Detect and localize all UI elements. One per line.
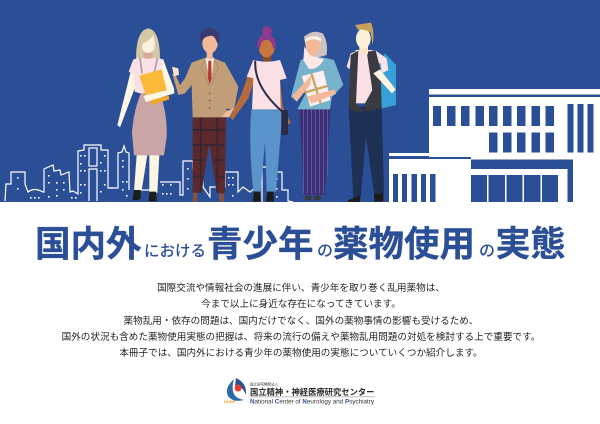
person: woman with crossbody bag bbox=[230, 26, 291, 202]
body text bbox=[62, 282, 540, 358]
lower roof band bbox=[471, 160, 573, 202]
skyline windows bbox=[17, 155, 278, 199]
logo bbox=[224, 378, 375, 406]
five young people bbox=[117, 23, 396, 202]
title: の bbox=[317, 243, 333, 260]
logo text: 国立研究開発法人 bbox=[250, 382, 278, 386]
logo text bbox=[250, 382, 375, 406]
lower windows bbox=[393, 174, 398, 202]
body line 1: 国際交流や情報社会の進展に伴い、青少年を取り巻く乱用薬物は、 bbox=[157, 282, 445, 294]
logo text: National Center of Neurology and Psychiatry bbox=[250, 398, 375, 406]
person: man in tan blazer bbox=[172, 28, 238, 202]
title: 青少年 bbox=[207, 224, 314, 264]
title: の bbox=[479, 243, 495, 260]
person: man with backpack bbox=[347, 23, 396, 202]
hospital building bbox=[389, 89, 600, 202]
title: 実態 bbox=[496, 225, 566, 264]
building main block bbox=[429, 89, 600, 94]
body line 2: 今まで以上に身近な存在になってきています。 bbox=[201, 299, 401, 310]
body line 3: 薬物乱用・依存の問題は、国内だけでなく、国外の薬物事情の影響も受けるため、 bbox=[124, 316, 478, 326]
logo mark bbox=[224, 378, 246, 404]
body line 5: 本冊子では、国内外における青少年の薬物使用の実態についていくつか紹介します。 bbox=[119, 348, 483, 358]
title: における bbox=[144, 242, 206, 260]
title bbox=[35, 224, 566, 264]
person: woman with book bbox=[117, 28, 174, 201]
building lower block bbox=[389, 153, 471, 156]
title: 薬物使用 bbox=[333, 224, 475, 264]
body line 4: 国外の状況も含めた薬物使用実態の把握は、将来の流行の備えや薬物乱用問題の対処を検討する上で重要です。 bbox=[62, 332, 540, 342]
blue background panel bbox=[0, 0, 600, 202]
city skyline outline bbox=[5, 145, 293, 202]
logo text: 国立精神・神経医療研究センター bbox=[250, 387, 374, 397]
title: 国内外 bbox=[35, 224, 142, 264]
person: woman in hijab with parcel bbox=[291, 32, 343, 201]
upper windows bbox=[393, 104, 594, 202]
logo mark: NCNP bbox=[224, 399, 236, 404]
